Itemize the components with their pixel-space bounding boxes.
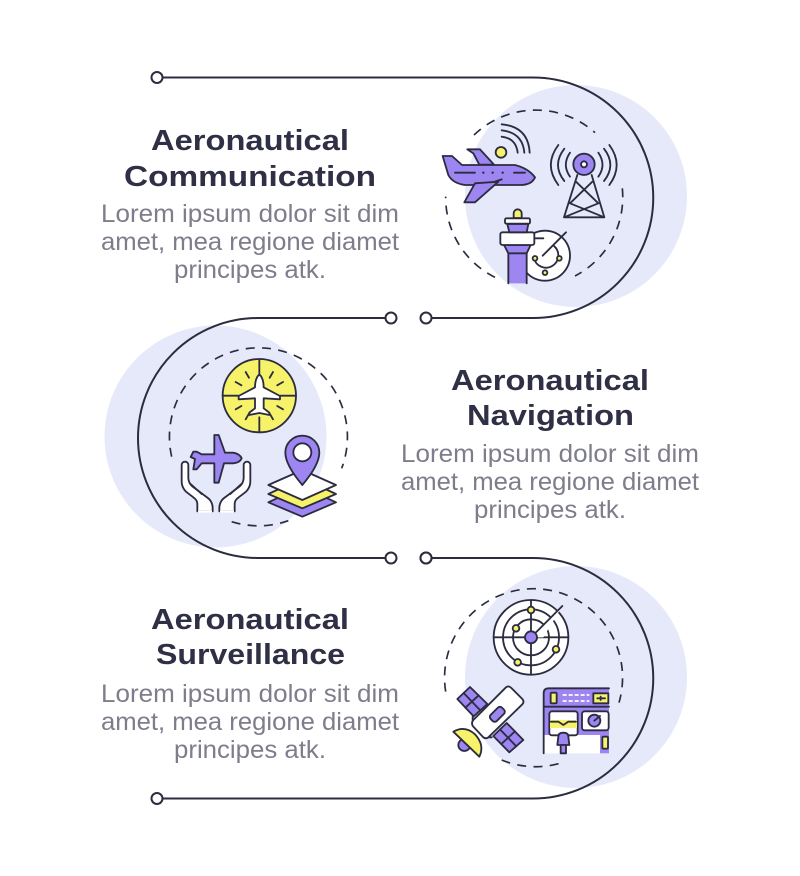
body text: Lorem ipsum dolor sit dim bbox=[101, 200, 399, 228]
heading: Surveillance bbox=[156, 639, 345, 671]
dashed ring bbox=[445, 589, 623, 767]
heading: Navigation bbox=[467, 400, 634, 432]
heading: Aeronautical bbox=[151, 604, 349, 636]
heading: Aeronautical bbox=[151, 125, 349, 157]
heading bbox=[124, 125, 376, 193]
body text: amet, mea regione diamet bbox=[101, 708, 399, 736]
heading bbox=[151, 604, 349, 671]
background circle bbox=[465, 566, 687, 788]
connector line bbox=[152, 552, 653, 804]
panel: aeronautical surveillance bbox=[101, 552, 687, 804]
icons bbox=[169, 348, 347, 526]
body text: Lorem ipsum dolor sit dim bbox=[101, 680, 399, 708]
body text bbox=[401, 440, 699, 524]
background circle bbox=[465, 85, 687, 307]
body text: amet, mea regione diamet bbox=[101, 228, 399, 256]
icon: control tower with radar bbox=[500, 209, 570, 283]
icon: control console bbox=[544, 688, 609, 753]
icon: airplane above hands bbox=[182, 435, 250, 513]
panel: aeronautical navigation bbox=[104, 312, 699, 564]
panel: aeronautical communication bbox=[101, 72, 687, 324]
heading bbox=[451, 365, 649, 432]
connector line bbox=[152, 72, 653, 324]
icon: satellite bbox=[453, 686, 523, 757]
heading: Aeronautical bbox=[451, 365, 649, 397]
body text bbox=[101, 200, 399, 284]
body text: Lorem ipsum dolor sit dim bbox=[401, 440, 699, 468]
icon: map pin on layers bbox=[268, 436, 336, 517]
icon: radio tower bbox=[551, 145, 617, 217]
body text: principes atk. bbox=[174, 736, 326, 764]
connector line bbox=[138, 312, 432, 564]
body text bbox=[101, 680, 399, 764]
icons bbox=[443, 110, 623, 283]
background circle bbox=[104, 326, 326, 548]
icon: airplane with signal bbox=[443, 124, 535, 202]
icon: compass with airplane bbox=[223, 359, 296, 432]
dashed ring bbox=[446, 110, 623, 277]
icon: radar screen bbox=[494, 600, 568, 675]
body text: amet, mea regione diamet bbox=[401, 468, 699, 496]
heading: Communication bbox=[124, 161, 376, 193]
body text: principes atk. bbox=[174, 256, 326, 284]
icons bbox=[445, 589, 623, 767]
body text: principes atk. bbox=[474, 496, 626, 524]
dashed ring bbox=[169, 348, 347, 526]
